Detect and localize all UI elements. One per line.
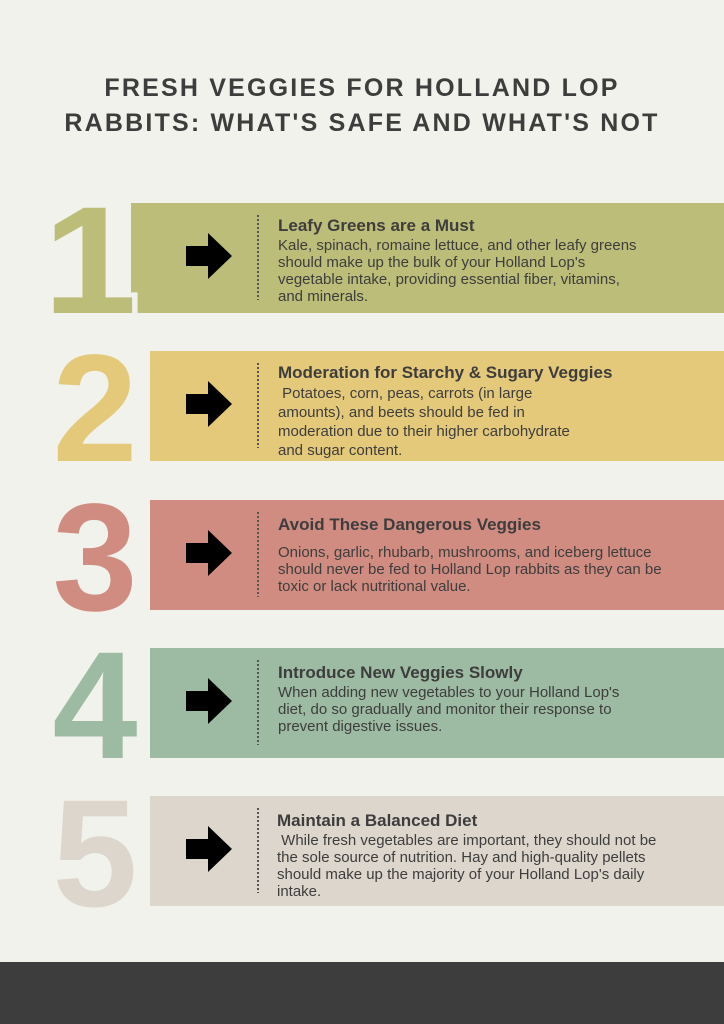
title (64, 74, 660, 137)
row 1: and minerals. (278, 288, 368, 305)
row 5: should make up the majority of your Holland Lop's daily (277, 866, 644, 883)
row 5: intake. (277, 883, 321, 900)
row 1: vegetable intake, providing essential fiber, vitamins, (278, 271, 620, 288)
row 2: Potatoes, corn, peas, carrots (in large (282, 385, 532, 402)
row 4: Introduce New Veggies Slowly (278, 663, 523, 682)
row 4 (52, 638, 724, 768)
row 2 (52, 341, 724, 471)
row 2: amounts), and beets should be fed in (278, 404, 525, 421)
row 1: should make up the bulk of your Holland Lop's (278, 254, 585, 271)
row 2: Moderation for Starchy & Sugary Veggies (278, 363, 612, 382)
row 3: toxic or lack nutritional value. (278, 578, 471, 595)
row 4: When adding new vegetables to your Holland Lop's (278, 684, 619, 701)
row 1: Leafy Greens are a Must (278, 216, 475, 235)
row 1: Kale, spinach, romaine lettuce, and other leafy greens (278, 237, 637, 254)
row 3: Avoid These Dangerous Veggies (278, 515, 541, 534)
row 4: diet, do so gradually and monitor their response to (278, 701, 612, 718)
row 5 (52, 786, 724, 916)
title: RABBITS: WHAT'S SAFE AND WHAT'S NOT (64, 109, 660, 137)
row 3 (52, 490, 724, 620)
footer bar (0, 962, 724, 1024)
row 2: and sugar content. (278, 442, 402, 459)
row 3: should never be fed to Holland Lop rabbits as they can be (278, 561, 662, 578)
row 5: While fresh vegetables are important, they should not be (281, 832, 656, 849)
row 3: Onions, garlic, rhubarb, mushrooms, and iceberg lettuce (278, 544, 652, 561)
row 4: prevent digestive issues. (278, 718, 442, 735)
row 1 (43, 193, 724, 323)
row 5: the sole source of nutrition. Hay and high-quality pellets (277, 849, 646, 866)
row 2: moderation due to their higher carbohydrate (278, 423, 570, 440)
title: FRESH VEGGIES FOR HOLLAND LOP (104, 74, 620, 102)
row 5: Maintain a Balanced Diet (277, 811, 477, 830)
